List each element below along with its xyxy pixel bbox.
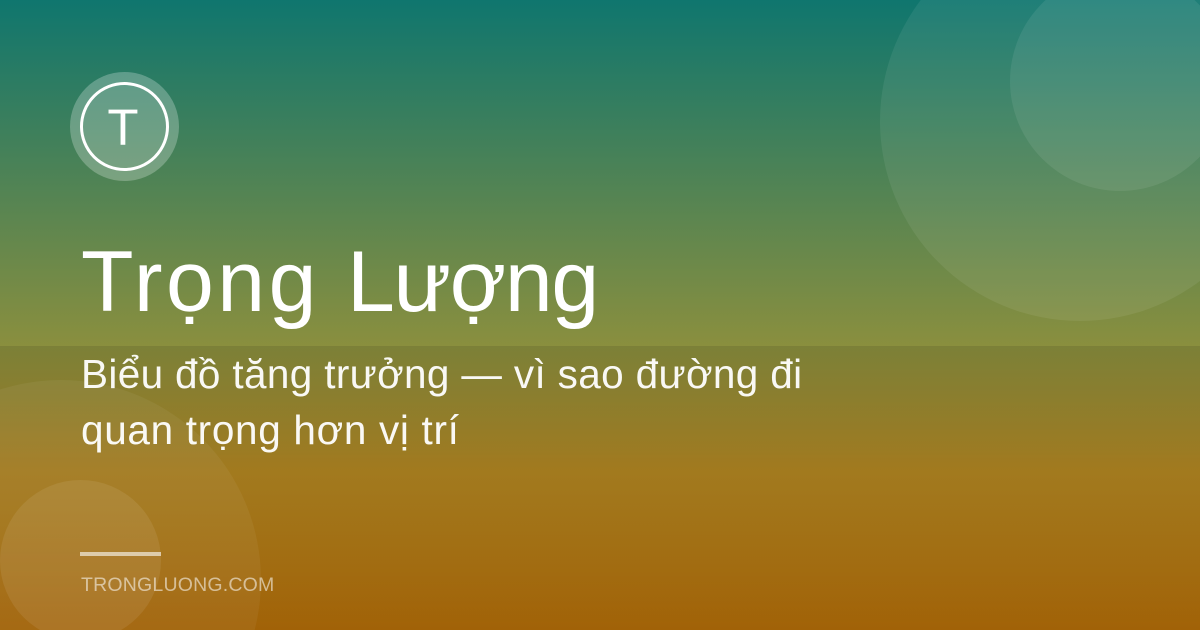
- lower dark band: [0, 346, 1200, 630]
- title: [81, 234, 598, 330]
- title: Trọng: [81, 234, 320, 330]
- logo badge: [70, 72, 179, 181]
- text: Lượng: [347, 234, 598, 330]
- site url: TRONGLUONG.COM: [81, 574, 274, 596]
- accent rule: [80, 552, 161, 556]
- logo badge: T: [107, 99, 139, 156]
- subtitle: Biểu đồ tăng trưởng — vì sao đường đi: [81, 351, 802, 397]
- subtitle: quan trọng hơn vị trí: [81, 407, 460, 453]
- subtitle: [81, 351, 802, 453]
